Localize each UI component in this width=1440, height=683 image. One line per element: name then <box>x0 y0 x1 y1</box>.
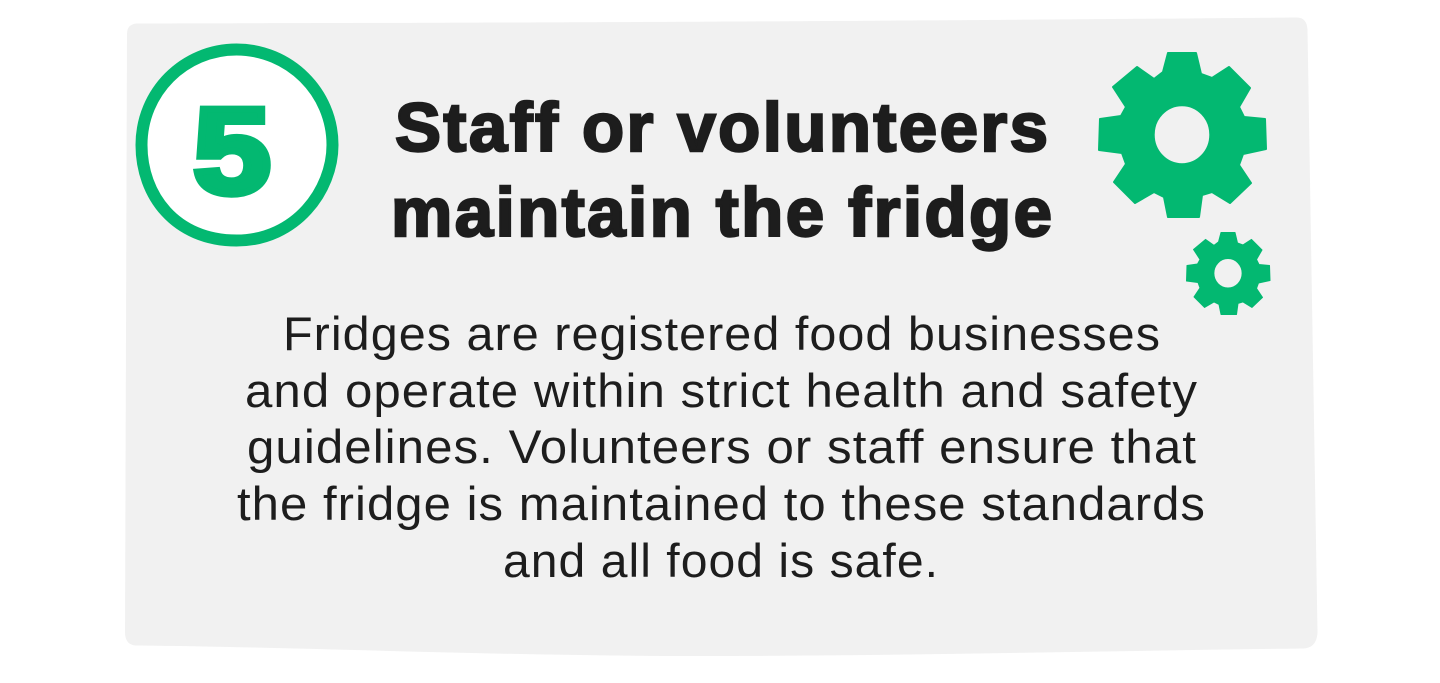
icon: gears <box>1099 53 1270 314</box>
title: maintain the fridge <box>391 174 1052 251</box>
body text: and operate within strict health and safety <box>245 364 1198 417</box>
body text: and all food is safe. <box>503 534 939 587</box>
badge: step number <box>142 50 332 240</box>
icon: large gear <box>1099 53 1266 217</box>
body text: guidelines. Volunteers or staff ensure that <box>247 420 1197 473</box>
number 5: 5 <box>193 83 271 219</box>
body text: Fridges are registered food businesses <box>283 307 1161 360</box>
badge circle <box>142 50 332 240</box>
icon: small gear <box>1186 232 1270 314</box>
body text: the fridge is maintained to these standards <box>237 477 1206 530</box>
body text <box>237 307 1206 587</box>
panel: card background <box>125 17 1318 656</box>
title <box>391 89 1052 251</box>
title: Staff or volunteers <box>395 89 1048 166</box>
